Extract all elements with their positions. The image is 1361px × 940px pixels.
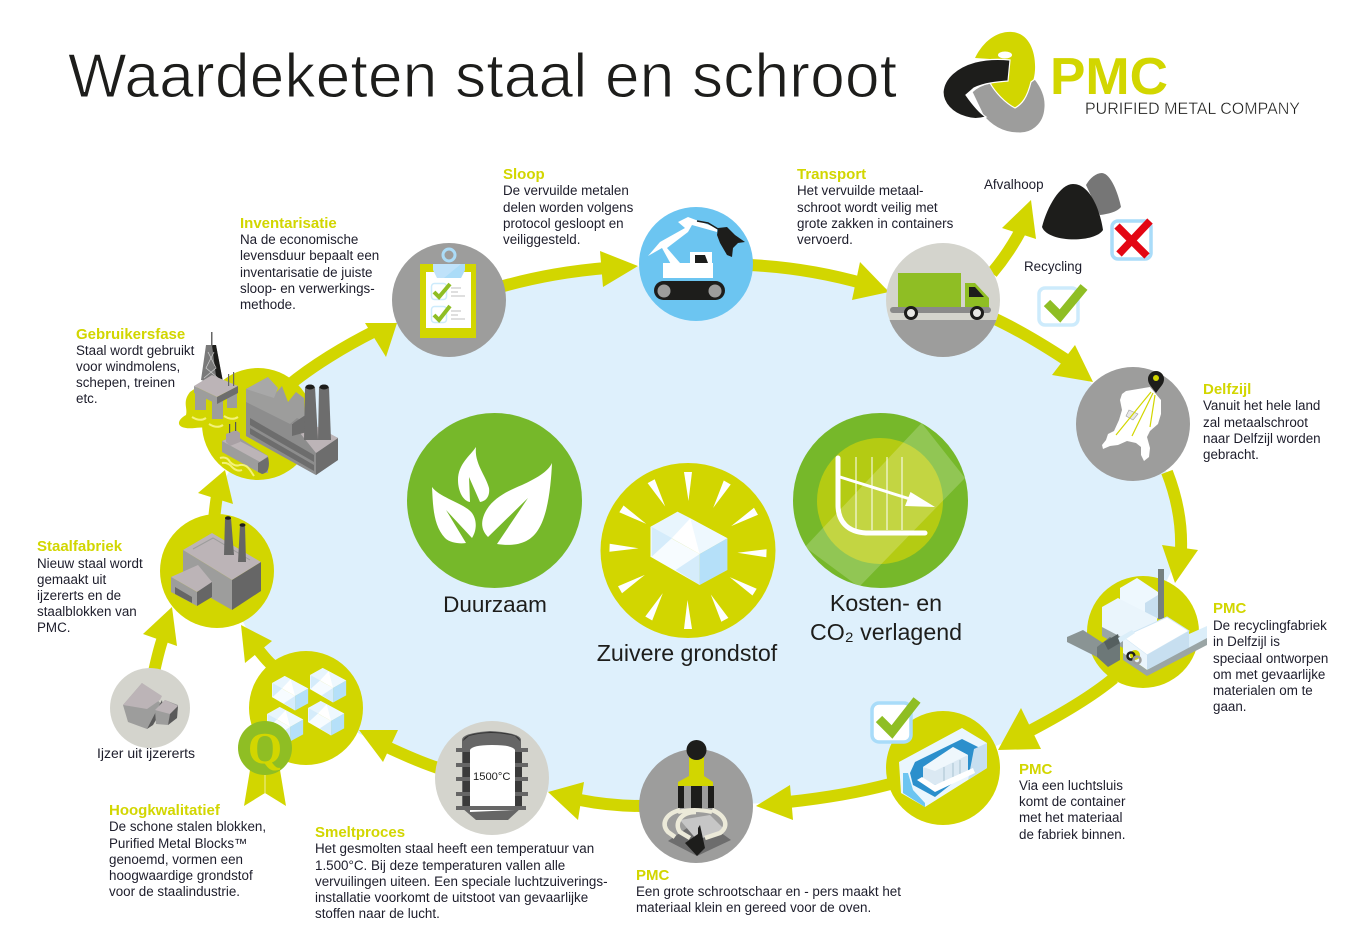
text: Inventarisatie (240, 215, 379, 312)
text: PMC schrootschaar: materiaal klein en gereed voor de oven. (636, 900, 871, 915)
checkbox 2 (432, 306, 465, 322)
arrow: shredder to furnace (548, 782, 642, 820)
text: Sloop (503, 166, 634, 247)
text: Hoogkwalitatief: Hoogkwalitatief (109, 802, 221, 819)
label: Duurzaam: Duurzaam (443, 592, 547, 617)
logo: PMC (943, 32, 1300, 133)
text: PMC recyclingfabriek: PMC (1213, 600, 1246, 617)
icon: shredder (639, 740, 753, 863)
text: Sloop: De vervuilde metalen (503, 183, 629, 198)
text: Inventarisatie: methode. (240, 297, 296, 312)
text: Delfzijl: Vanuit het hele land (1203, 398, 1320, 413)
background loop area (214, 264, 1181, 806)
text: Hoogkwalitatief: Purified Metal Blocks™ (109, 836, 247, 851)
arrow: sloop to transport (750, 262, 889, 300)
text: PMC recyclingfabriek: in Delfzijl is (1213, 634, 1280, 649)
cube (650, 512, 727, 585)
text: Hoogkwalitatief: voor de staalindustrie. (109, 884, 240, 899)
text: PMC luchtsluis (1019, 761, 1126, 842)
icon: quality badge (238, 721, 292, 806)
arrow: Delfzijl to PMC (1162, 472, 1198, 583)
ship (220, 422, 269, 476)
label: Afvalhoop: Afvalhoop (984, 177, 1044, 192)
text: Inventarisatie: levensduur bepaalt een (240, 248, 379, 263)
text: Staalfabriek: PMC. (37, 620, 70, 635)
icon: red cross checkbox (1112, 221, 1151, 259)
text: Hoogkwalitatief (109, 802, 266, 899)
icon: inventarisatie clipboard (392, 243, 506, 357)
text: Smeltproces (315, 824, 608, 921)
text: PMC recyclingfabriek: De recyclingfabriek (1213, 618, 1327, 633)
label: Kosten- en CO2 verlagend: CO₂ verlagend (810, 619, 962, 645)
label: Recycling: Recycling (1024, 259, 1082, 274)
text: Smeltproces: Het gesmolten staal heeft een temperatuur van (315, 841, 594, 856)
text: Sloop: Sloop (503, 166, 545, 183)
icon: container check (872, 700, 917, 742)
text: Gebruikersfase: voor windmolens, (76, 359, 180, 374)
arrow: transport to Delfzijl (993, 318, 1093, 382)
icon: Delfzijl map (1076, 367, 1190, 481)
text: Delfzijl: Delfzijl (1203, 381, 1251, 398)
icon: iron ore (110, 668, 190, 748)
text: PMC recyclingfabriek: om met gevaarlijke (1213, 667, 1325, 682)
mini logo (1128, 650, 1140, 664)
icon: leaves duurzaam (407, 413, 582, 588)
icon: metal blocks (249, 651, 363, 765)
text: PMC luchtsluis: Via een luchtsluis (1019, 778, 1123, 793)
text: Delfzijl: zal metaalschroot (1203, 415, 1308, 430)
text: Hoogkwalitatief: De schone stalen blokken, (109, 819, 266, 834)
icon: furnace (435, 721, 549, 835)
text: Smeltproces: 1.500°C. Bij deze temperaturen vallen alle (315, 858, 565, 873)
text: Hoogkwalitatief: hoogwaardige grondstof (109, 868, 253, 883)
icon: afvalhoop piles (1042, 173, 1121, 239)
grey annex (1067, 630, 1135, 667)
text: Staalfabriek: gemaakt uit (37, 572, 107, 587)
text: PMC luchtsluis: de fabriek binnen. (1019, 827, 1125, 842)
text: Inventarisatie: Inventarisatie (240, 215, 337, 232)
text: Gebruikersfase: etc. (76, 391, 98, 406)
text: Transport: Transport (797, 166, 866, 183)
icon: zuivere grondstof cube (600, 463, 776, 638)
label: Kosten- en CO2 verlagend (810, 590, 962, 645)
icon: quality badge: Q (248, 724, 282, 773)
oil rig (192, 332, 238, 427)
text: Transport: vervoerd. (797, 232, 853, 247)
text: Gebruikersfase (76, 326, 195, 406)
text: PMC luchtsluis: komt de container (1019, 794, 1126, 809)
arrow: blocks to staalfabriek (241, 625, 272, 665)
text: Staalfabriek: Nieuw staal wordt (37, 556, 143, 571)
text: Delfzijl: gebracht. (1203, 447, 1259, 462)
arrow: PMC to container (998, 678, 1114, 750)
icon: airlock container (886, 711, 1000, 825)
text: Transport (797, 166, 954, 247)
text: Sloop: protocol gesloopt en (503, 216, 624, 231)
text: Inventarisatie: Na de economische (240, 232, 358, 247)
text: PMC luchtsluis: PMC (1019, 761, 1052, 778)
text: PMC luchtsluis: met het materiaal (1019, 810, 1122, 825)
icon: recycling check (1039, 287, 1084, 325)
text: Smeltproces: installatie voorkomt de uitstoot van gevaarlijke (315, 890, 588, 905)
icon: recycling factory (1067, 569, 1207, 688)
text: Delfzijl: naar Delfzijl worden (1203, 431, 1321, 446)
text: PMC recyclingfabriek: speciaal ontworpen (1213, 651, 1328, 666)
icon: gebruikersfase rig factory ship (179, 332, 338, 480)
text: Staalfabriek: Staalfabriek (37, 538, 123, 555)
text: Gebruikersfase: Staal wordt gebruikt (76, 343, 195, 358)
text: PMC schrootschaar (636, 867, 901, 915)
icon: kosten chart (793, 413, 968, 588)
text: PMC schrootschaar: PMC (636, 867, 670, 884)
text: PMC schrootschaar: Een grote schrootschaar en - pers maakt het (636, 884, 901, 899)
icon: sloop excavator (639, 207, 753, 321)
text: Hoogkwalitatief: genoemd, vormen een (109, 852, 243, 867)
arrow: staalfabriek to gebruikersfase (198, 470, 233, 520)
text: Transport: schroot wordt veilig met (797, 200, 938, 215)
text: Gebruikersfase: schepen, treinen (76, 375, 175, 390)
text: Staalfabriek: staalblokken van (37, 604, 137, 619)
text: Smeltproces: stoffen naar de lucht. (315, 906, 440, 921)
arrow: gebruikersfase to inventarisatie (288, 323, 397, 386)
text: Transport: grote zakken in containers (797, 216, 954, 231)
arrow: furnace to blocks (359, 730, 438, 768)
text: Sloop: delen worden volgens (503, 200, 634, 215)
text: Sloop: veiliggesteld. (503, 232, 580, 247)
arrow: inventarisatie to sloop (500, 251, 638, 287)
text: Inventarisatie: inventarisatie de juiste (240, 265, 372, 280)
text: Gebruikersfase: Gebruikersfase (76, 326, 185, 343)
label: Zuivere grondstof: Zuivere grondstof (597, 640, 778, 666)
icon: transport truck (880, 243, 1000, 360)
checkbox 1 (432, 284, 465, 300)
text: Smeltproces: vervuilingen uiteen. Een speciale luchtzuiverings- (315, 874, 608, 889)
factory (246, 377, 338, 475)
text: PMC recyclingfabriek: materialen om te (1213, 683, 1313, 698)
text: Staalfabriek (37, 538, 143, 635)
text: Delfzijl (1203, 381, 1321, 462)
arrow: transport to afvalhoop (992, 200, 1036, 273)
logo: PMC: PMC (1050, 48, 1168, 106)
icon: furnace: 1500°C (473, 771, 510, 783)
text: Staalfabriek: ijzererts en de (37, 588, 121, 603)
arrow: container to shredder (756, 784, 890, 820)
text: Transport: Het vervuilde metaal- (797, 183, 924, 198)
label: Kosten- en CO2 verlagend: Kosten- en (830, 590, 942, 616)
label: Ijzer uit ijzererts: Ijzer uit ijzererts (97, 745, 195, 761)
arrow: ijzer to staalfabriek (143, 607, 177, 672)
text: Smeltproces: Smeltproces (315, 824, 405, 841)
icon: staalfabriek (160, 514, 274, 628)
text: Inventarisatie: sloop- en verwerkings- (240, 281, 375, 296)
rays (609, 472, 767, 629)
title: Waardeketen staal en schroot (68, 42, 897, 111)
logo: PMC: PURIFIED METAL COMPANY (1085, 100, 1300, 118)
text: PMC recyclingfabriek: gaan. (1213, 699, 1247, 714)
text: PMC recyclingfabriek (1213, 600, 1328, 714)
